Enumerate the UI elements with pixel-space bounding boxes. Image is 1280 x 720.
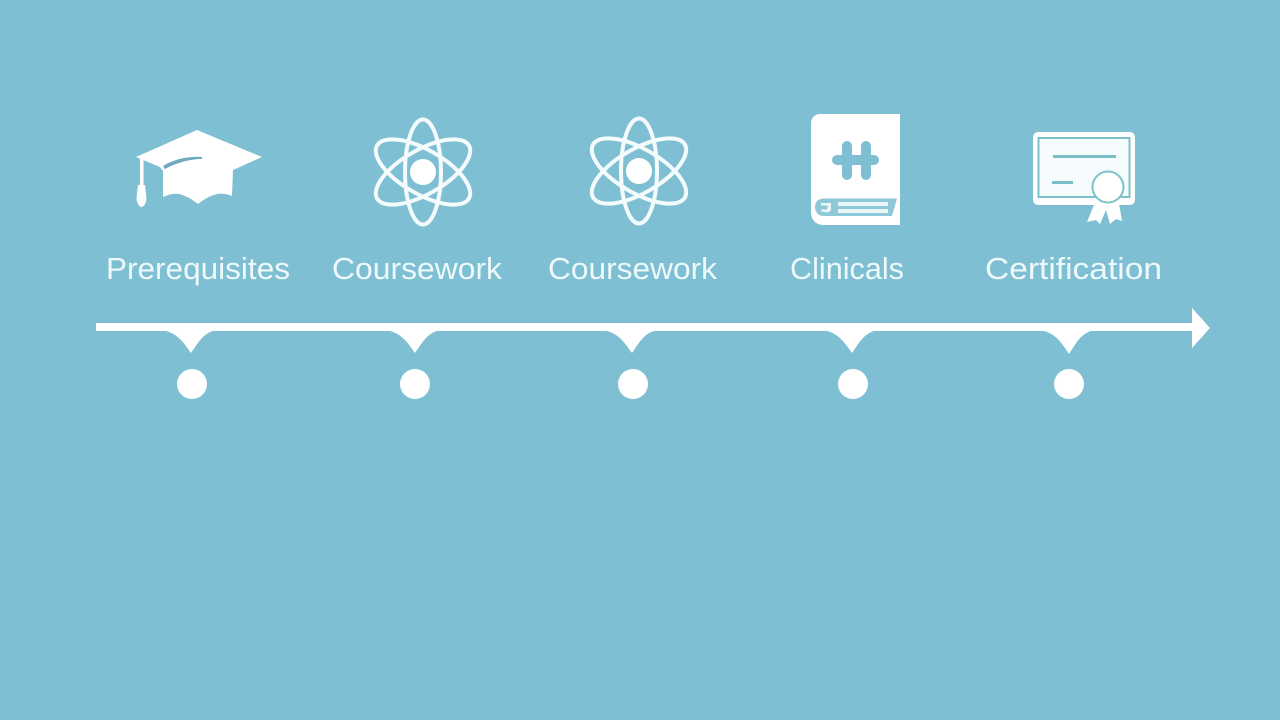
timeline arrow bbox=[96, 308, 1210, 354]
timeline dot: Clinicals bbox=[838, 369, 868, 399]
timeline dot: Certification bbox=[1054, 369, 1084, 399]
icon: medical book bbox=[811, 114, 900, 225]
timeline dot: Prerequisites bbox=[177, 369, 207, 399]
timeline dot: Coursework bbox=[400, 369, 430, 399]
label: Coursework: Coursework bbox=[332, 251, 503, 286]
icon: atom, coursework bbox=[366, 120, 480, 224]
label: Certification: Certification bbox=[985, 251, 1162, 286]
label: Prerequisites: Prerequisites bbox=[106, 251, 290, 286]
icon: certificate bbox=[1033, 132, 1135, 224]
label: Coursework (second): Coursework bbox=[548, 251, 718, 286]
timeline dot: second Coursework bbox=[618, 369, 648, 399]
icon: atom, second coursework bbox=[582, 118, 696, 224]
label: Clinicals: Clinicals bbox=[790, 251, 904, 286]
icon: graduation cap bbox=[136, 130, 262, 207]
